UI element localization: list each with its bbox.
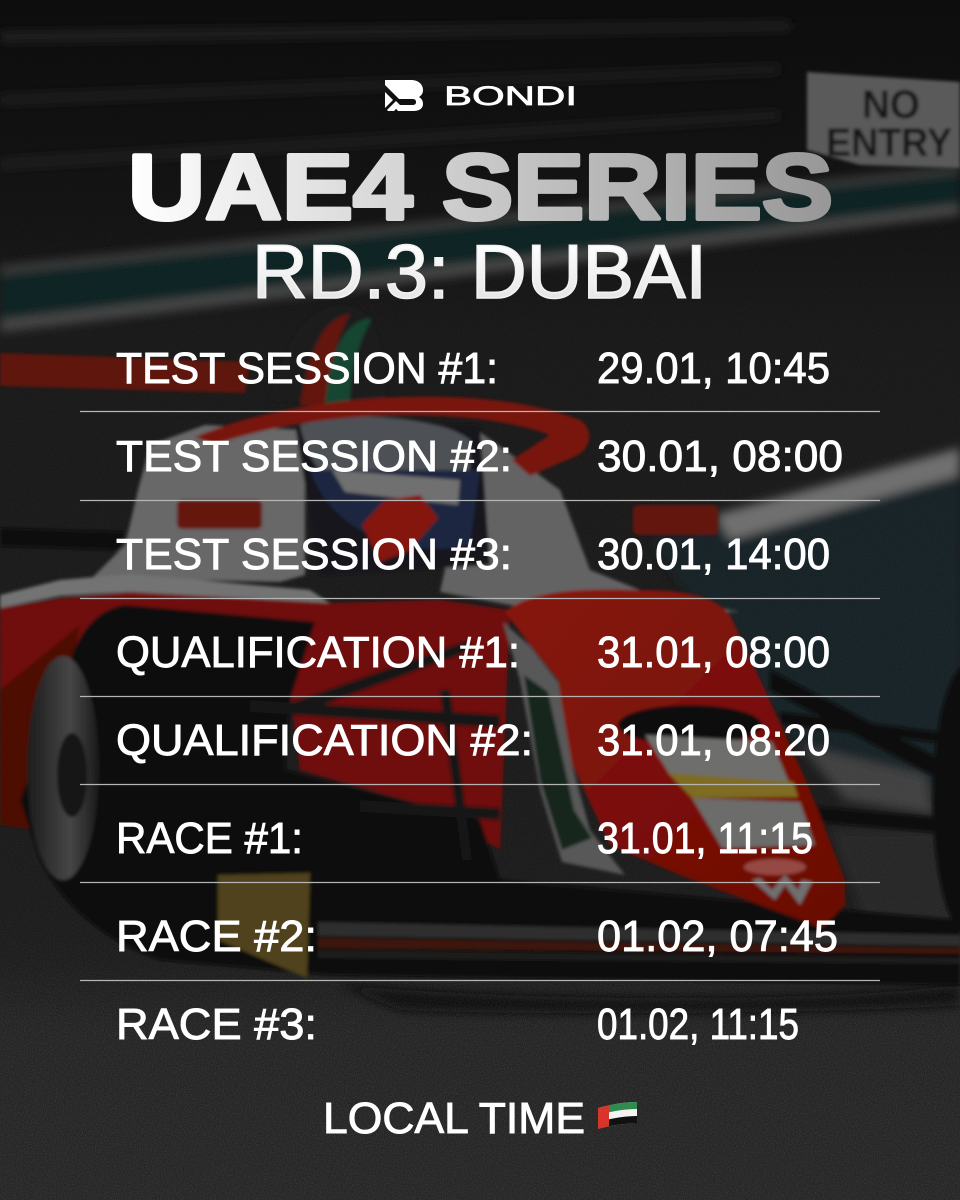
row: qualification 1: 31.01, 08:00 [597, 628, 830, 677]
white body left [92, 425, 305, 582]
row: qualification 2: 31.01, 08:20 [597, 716, 830, 765]
row: race 1 [116, 814, 813, 863]
sponsor plate [218, 873, 310, 978]
row: qualification 2 [116, 716, 830, 765]
dark chassis [20, 605, 960, 985]
suspension rods [250, 640, 500, 860]
row: race 2: RACE #2: [116, 912, 317, 961]
nose graphics [618, 705, 815, 905]
driver glove [362, 495, 438, 562]
white stripe [503, 622, 625, 875]
row: test session 2: TEST SESSION #2: [116, 432, 512, 481]
icon: UAE flag [598, 1102, 637, 1129]
cockpit [295, 425, 490, 575]
row: test session 1: TEST SESSION #1: [116, 344, 498, 393]
row: race 1: RACE #1: [116, 814, 303, 863]
wordmark: BONDI [444, 81, 577, 111]
sign: no entry: ENTRY [826, 121, 952, 165]
sign: no entry [807, 72, 960, 168]
row: race 3 [116, 1000, 799, 1049]
green stripe [524, 675, 592, 850]
row: race 3: 01.02, 11:15 [597, 1000, 799, 1049]
halo [195, 397, 589, 476]
row: test session 3: 30.01, 14:00 [597, 530, 830, 579]
row: race 2: 01.02, 07:45 [597, 912, 838, 961]
race car [0, 306, 960, 985]
row: qualification 2: QUALIFICATION #2: [116, 716, 533, 765]
sign: no entry: NO [862, 83, 920, 127]
row: race 3: RACE #3: [116, 1000, 317, 1049]
row: test session 1 [116, 344, 830, 393]
mirrors [177, 500, 262, 529]
rear wing [0, 353, 250, 393]
logo mark [385, 80, 423, 111]
title: UAE4 SERIES [128, 135, 833, 239]
row: test session 2: 30.01, 08:00 [597, 432, 843, 481]
left rod [0, 528, 125, 550]
row: qualification 1: QUALIFICATION #1: [116, 628, 520, 677]
right wheel [933, 665, 960, 935]
row: test session 2 [116, 432, 843, 481]
footer label: LOCAL TIME [323, 1094, 585, 1143]
row: race 2 [116, 912, 838, 961]
side pod: red band [0, 592, 510, 850]
roll hoop [270, 306, 386, 405]
row: test session 1: 29.01, 10:45 [597, 344, 830, 393]
row: race 1: 31.01, 11:15 [597, 814, 813, 863]
row: test session 3 [116, 530, 830, 579]
nose [505, 589, 845, 928]
front wheel rim [27, 656, 99, 880]
row: qualification 1 [116, 628, 830, 677]
footer: local time [326, 1102, 637, 1134]
row: test session 3: TEST SESSION #3: [116, 530, 512, 579]
white body right [440, 425, 740, 612]
front wing [318, 922, 960, 964]
subtitle: RD.3: DUBAI [252, 230, 707, 315]
brand logo [385, 80, 577, 111]
schedule table [80, 344, 880, 1049]
